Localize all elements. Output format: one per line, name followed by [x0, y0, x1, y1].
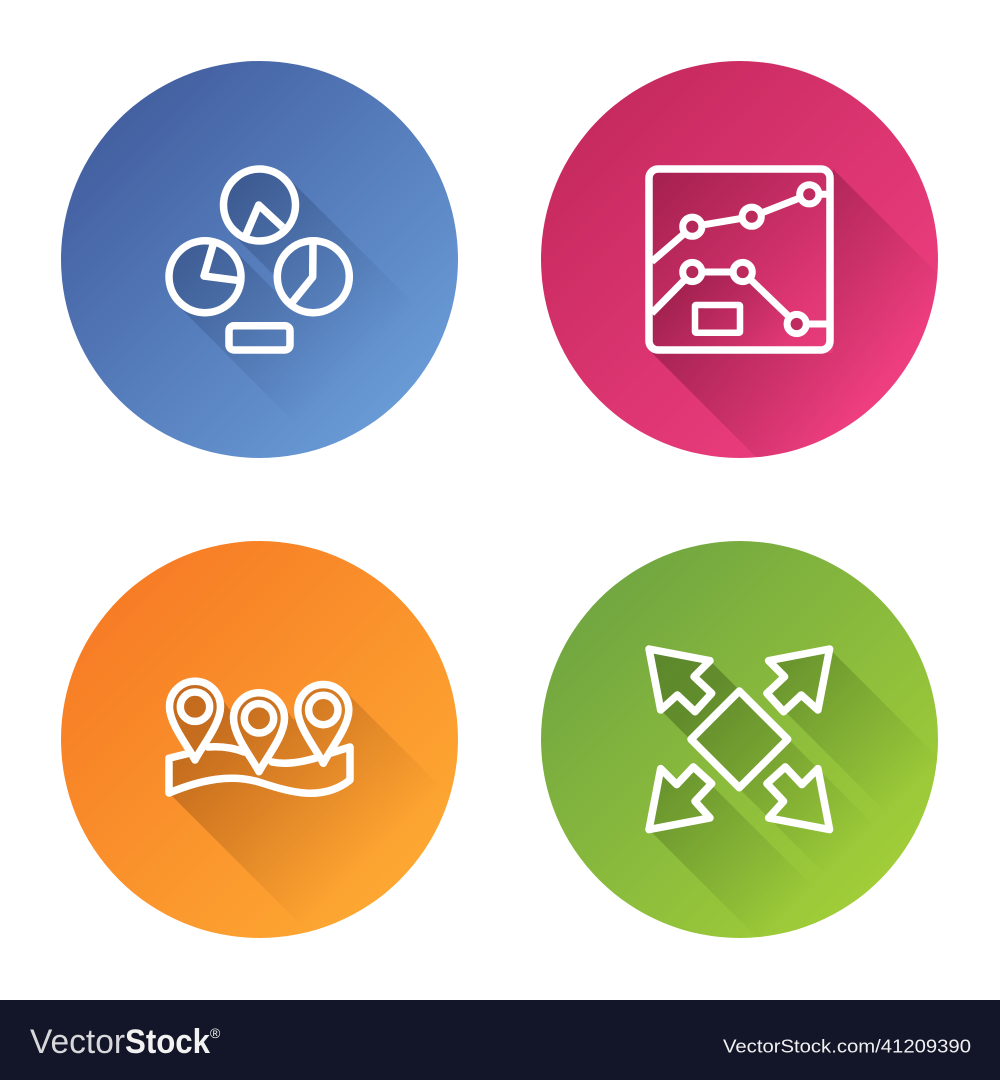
label rectangle — [229, 326, 290, 350]
VectorStock logo: Stock — [125, 1023, 210, 1061]
icon: three pie charts and label — [169, 169, 349, 350]
right pie chart — [277, 241, 349, 313]
orange circle — [61, 541, 458, 938]
icon: line chart — [649, 169, 830, 350]
top pie chart — [224, 169, 296, 241]
green circle — [541, 541, 938, 938]
panel: pink circle with line chart — [541, 61, 938, 458]
VectorStock logo — [30, 1023, 221, 1061]
center diamond — [691, 691, 788, 788]
chart frame — [649, 169, 830, 350]
long shadow: pins and map — [172, 685, 419, 904]
pin 3 — [298, 684, 349, 763]
icon: four arrows around a diamond — [649, 649, 830, 830]
image id: VectorStock.com/41209390 — [723, 1036, 971, 1056]
map strip — [169, 747, 350, 793]
pin 2 — [234, 693, 284, 772]
arrow top right — [767, 649, 830, 712]
blue circle — [61, 61, 458, 458]
arrow top left — [649, 649, 712, 712]
VectorStock logo: ® — [210, 1025, 221, 1041]
panel: green circle with expanding arrows — [541, 541, 938, 938]
left pie chart — [169, 241, 241, 313]
VectorStock logo: Vector — [30, 1023, 125, 1061]
panel: blue circle with pie charts — [61, 61, 458, 458]
long shadow: chart frame — [652, 169, 928, 457]
long shadow: arrows and diamond — [652, 652, 914, 914]
icon: map with three pins — [169, 681, 350, 793]
arrow bottom left — [649, 767, 712, 830]
upper data line — [652, 185, 827, 262]
arrow bottom right — [767, 767, 830, 830]
lower data line — [652, 262, 827, 334]
label rectangle — [695, 305, 740, 333]
panel: orange circle with map pins — [61, 541, 458, 938]
footer bar — [0, 1000, 1000, 1080]
pin 1 — [170, 681, 220, 760]
pink circle — [541, 61, 938, 458]
long shadow: pie charts — [172, 172, 382, 391]
